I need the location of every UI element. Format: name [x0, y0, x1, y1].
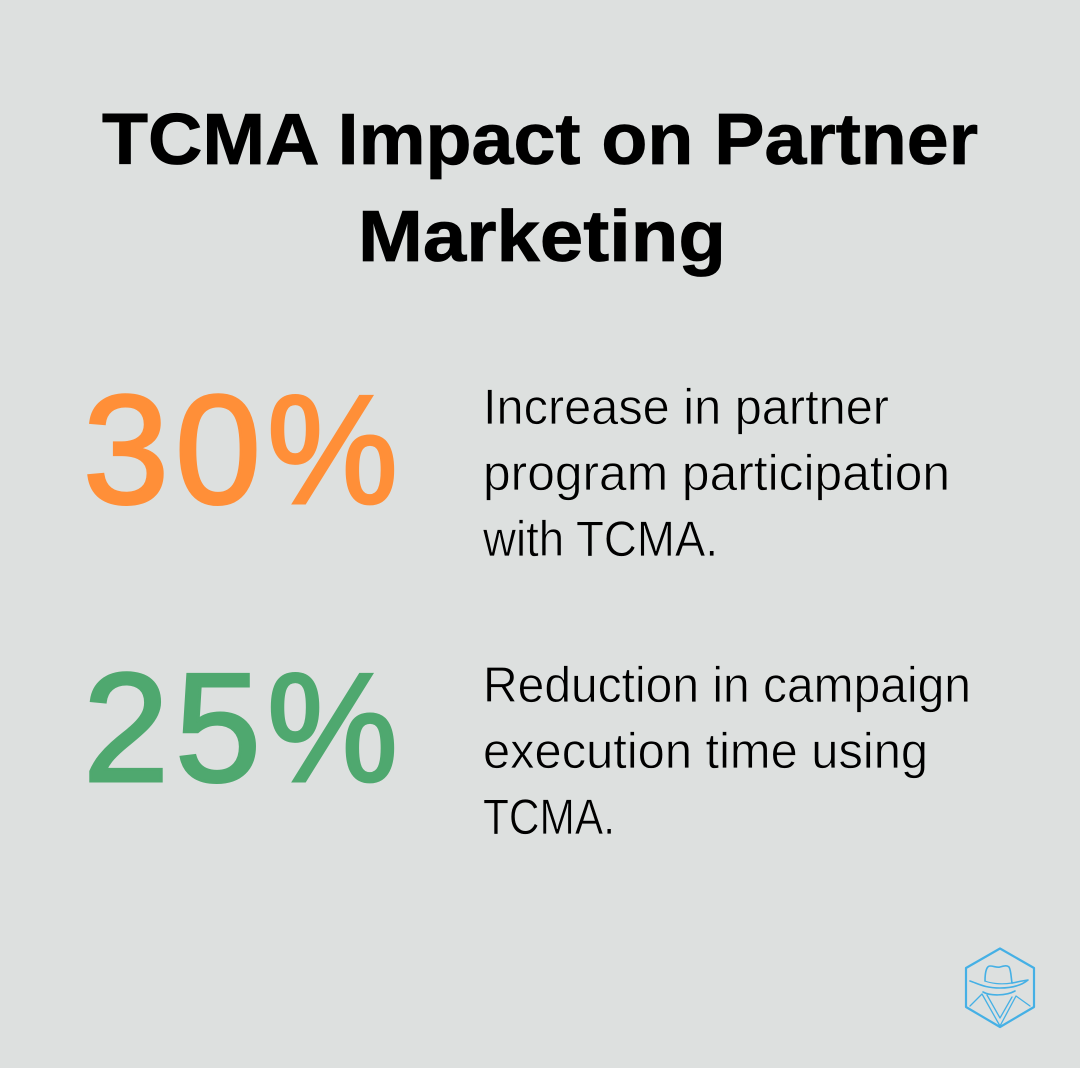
text block: partner program participation: program participation: [483, 445, 950, 501]
title: [102, 100, 978, 277]
icon: hexagon spy logo: [966, 948, 1034, 1027]
text block: campaign execution time: Reduction in campaign: [483, 657, 971, 713]
stat: 30%: %: [267, 363, 398, 536]
text block: partner program participation: [482, 379, 950, 567]
stat: 25%: 2: [83, 641, 169, 814]
title: Marketing: [358, 197, 726, 277]
title: TCMA Impact on Partner: [102, 100, 978, 180]
stat: 25%: [83, 641, 398, 814]
stat: 30%: 3: [83, 363, 169, 536]
text block: partner program participation: with TCMA.: [482, 511, 718, 567]
text block: partner program participation: Increase in partner: [483, 379, 889, 435]
stat: 30%: [83, 363, 398, 536]
stat: 25%: 5: [175, 641, 261, 814]
stat: 30%: 0: [175, 363, 261, 536]
text block: campaign execution time: [483, 657, 971, 845]
text block: campaign execution time: execution time using: [483, 723, 928, 779]
text block: campaign execution time: TCMA.: [483, 789, 615, 845]
stat: 25%: %: [267, 641, 398, 814]
